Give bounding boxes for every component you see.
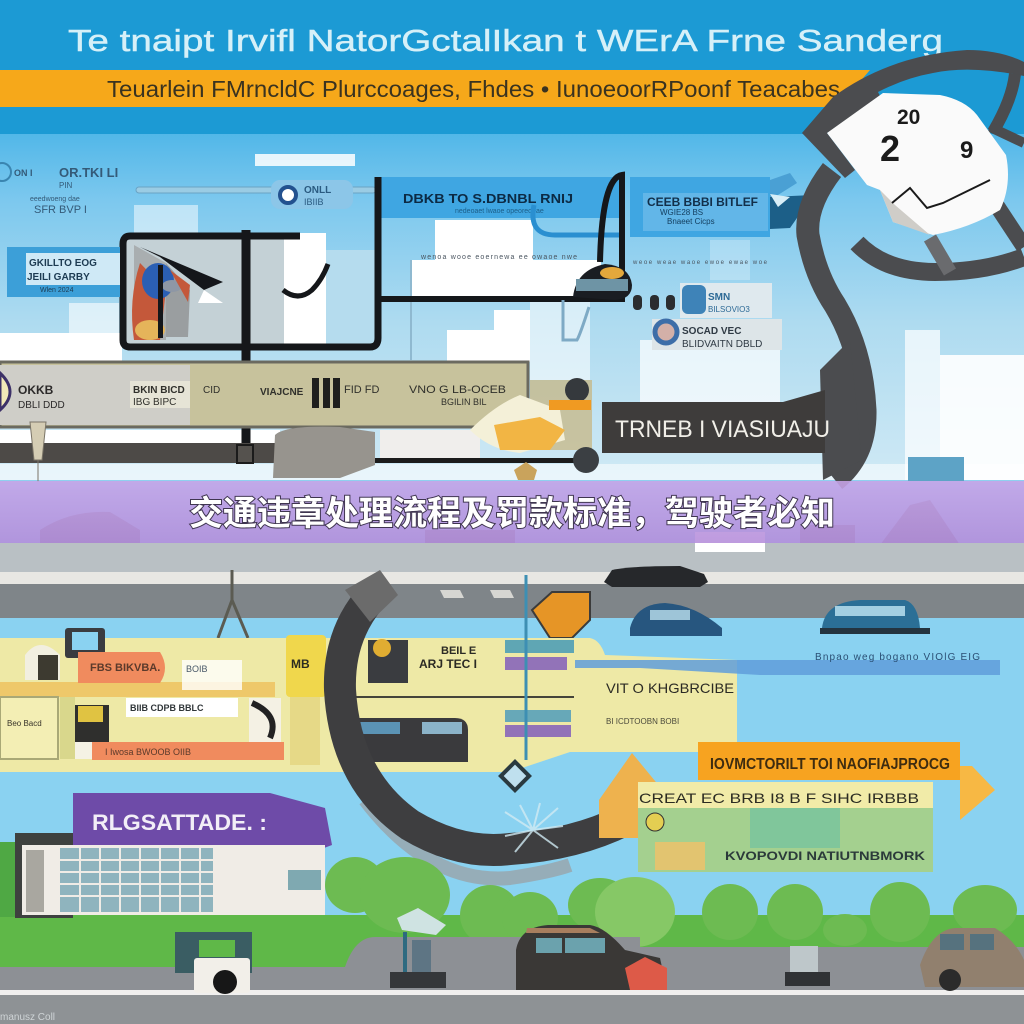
top left label	[0, 163, 118, 216]
blue info panel: CEEB BBBI BITLEF	[647, 195, 758, 209]
khaki panel: FID FD	[344, 384, 379, 396]
purple banner	[0, 481, 1024, 543]
blue info panel: Bnaeet Cicps	[667, 217, 715, 226]
distant building	[908, 457, 964, 481]
subtitle band	[0, 70, 870, 107]
left blue note: GKILLTO EOG	[29, 258, 97, 269]
lower grey road	[0, 937, 1024, 1024]
left blue note: Wlen 2024	[40, 287, 74, 294]
firework icon	[505, 803, 563, 852]
orange process label: IOVMCTORILT TOI NAOFIAJPROCG	[710, 756, 950, 773]
white text strip: wenoa wooe eoernewa ee owaoe nwe	[420, 254, 577, 261]
blue info panel: DBKB TO S.DBNBL RNIJ	[403, 191, 573, 206]
blue info panel	[380, 173, 813, 237]
yellow panel: BEIL E	[441, 645, 476, 657]
up arrow shape	[599, 753, 660, 838]
top left label: SFR BVP I	[34, 204, 87, 216]
yellow panel: I Iwosa BWOOB OIIB	[105, 747, 191, 757]
highway cars	[604, 566, 930, 636]
small pills and notes	[633, 283, 782, 350]
small pills and notes: BLIDVAITN DBLD	[682, 339, 762, 350]
car centre	[516, 925, 667, 990]
scribble cloud icon	[470, 378, 599, 480]
khaki panel: IBG BIPC	[133, 397, 176, 408]
sky background	[0, 130, 1024, 480]
blue info panel: nedeoaet lwaoe opeoreoeae	[455, 208, 544, 215]
dark label: TRNEB I VIASIUAJU	[615, 416, 830, 443]
black framed panel	[123, 175, 625, 445]
steering wheel and stem	[802, 50, 1024, 480]
top left label: PIN	[59, 181, 73, 190]
lower background	[0, 543, 1024, 943]
purple tag	[73, 793, 332, 857]
center top pill	[136, 180, 376, 209]
center top pill: ONLL	[304, 185, 331, 196]
machine icon	[175, 932, 252, 994]
khaki panel: VIAJCNE	[260, 387, 304, 398]
left blue note: JEILI GARBY	[27, 272, 90, 283]
khaki panel	[0, 362, 528, 427]
green card	[638, 782, 933, 872]
small pills and notes: SOCAD VEC	[682, 326, 741, 337]
vertical pointer	[501, 575, 529, 790]
yellow panel: BOIB	[186, 664, 208, 674]
yellow panel: VIT O KHGBRCIBE	[606, 680, 734, 696]
camera post icon	[390, 908, 446, 988]
arrow sign	[532, 592, 590, 638]
small pills and notes: SMN	[708, 292, 730, 303]
yellow panel: BI ICDTOOBN BOBI	[606, 717, 679, 726]
white paper with numbers: 9	[960, 137, 973, 164]
green hills and trees	[0, 842, 1024, 967]
top left label: eeedwoeng dae	[30, 196, 80, 203]
small pills and notes: BILSOVIO3	[708, 305, 750, 314]
khaki panel: CID	[203, 385, 220, 396]
blue wave strip: Bnpao weg bogano VIOlG EIG	[815, 652, 980, 663]
yellow panel: ARJ TEC I	[419, 657, 477, 671]
top left label: OR.TKI LI	[59, 165, 118, 180]
dark label	[602, 390, 830, 453]
yellow panel: Beo Bacd	[7, 719, 42, 728]
vending robot	[785, 946, 830, 986]
rocket-like icon	[132, 245, 223, 340]
banner heading: 交通违章处理流程及罚款标准，驾驶者必知	[189, 486, 835, 535]
office building	[15, 833, 325, 918]
yellow panel: BIIB CDPB BBLC	[130, 703, 204, 713]
orange process label	[698, 742, 995, 820]
purple tag: RLGSATTADE. :	[92, 810, 267, 835]
top left label: ON I	[14, 168, 33, 178]
white paper with numbers	[827, 93, 1008, 235]
middle grey road	[0, 532, 1024, 618]
road strip	[0, 427, 575, 478]
title: Te tnaipt Irvifl NatorGctalIkan t WErA Frne Sanderg	[68, 23, 943, 58]
green card: KVOPOVDI NATIUTNBMORK	[725, 849, 925, 863]
header band	[0, 0, 1024, 134]
center top pill: IBIIB	[304, 197, 324, 207]
train icon	[573, 264, 632, 300]
blue wave strip	[575, 652, 1000, 675]
blue info panel: WGIE28 BS	[660, 208, 703, 217]
street lamp	[30, 422, 46, 482]
second strip: weoe weae waoe ewoe ewae woe	[632, 260, 768, 266]
tripod	[218, 570, 248, 638]
yellow panel	[0, 628, 737, 772]
khaki panel: BGILIN BIL	[441, 397, 487, 407]
green card: CREAT EC BRB I8 B F SIHC IRBBB	[639, 790, 919, 806]
yellow panel: MB	[291, 657, 310, 671]
white paper with numbers: 2	[880, 128, 900, 169]
khaki panel: BKIN BICD	[133, 385, 185, 396]
khaki panel: OKKB	[18, 383, 54, 397]
faint cars behind banner	[40, 500, 960, 550]
car right	[920, 928, 1024, 991]
yellow panel: FBS BIKVBA.	[90, 662, 160, 674]
subtitle band: Teuarlein FMrncldC Plurccoages, Fhdes • IunoeoorRPoonf Teacabes	[107, 76, 840, 102]
white paper with numbers: 20	[897, 106, 920, 129]
khaki panel: DBLI DDD	[18, 400, 65, 411]
khaki panel: VNO G LB-OCEB	[409, 384, 506, 396]
city skyline	[0, 154, 1024, 480]
left blue note	[7, 247, 120, 297]
faint watermark: manusz Coll	[0, 1012, 55, 1023]
bus	[356, 718, 468, 762]
large dark ring	[340, 570, 625, 879]
